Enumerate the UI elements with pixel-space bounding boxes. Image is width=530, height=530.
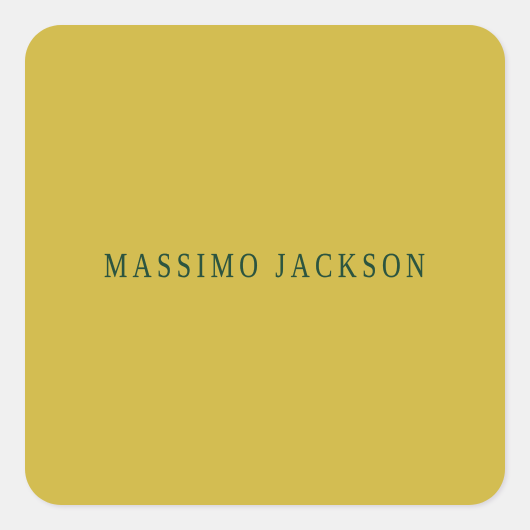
title: name: MASSIMO JACKSON [104,245,425,285]
